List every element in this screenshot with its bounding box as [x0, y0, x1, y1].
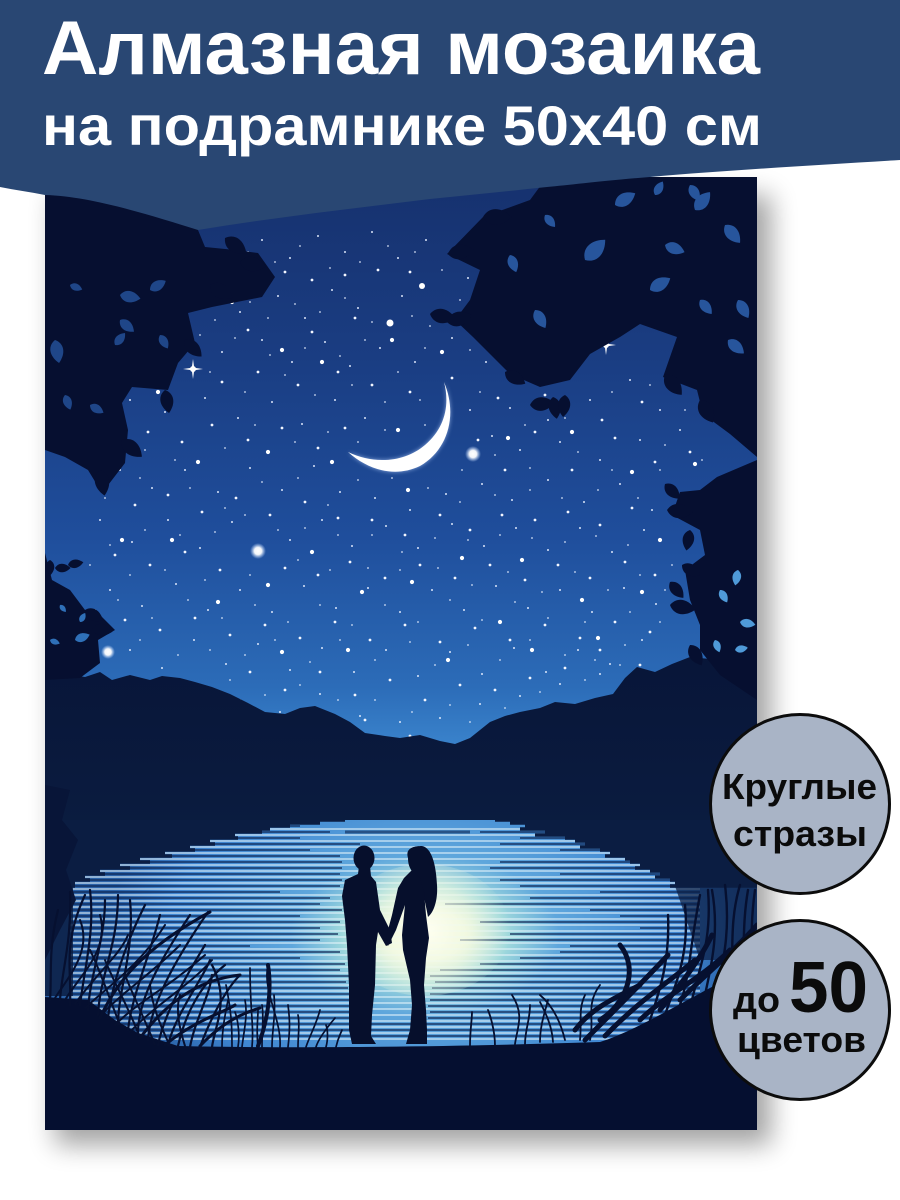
- leaf highlights right side: [712, 569, 756, 654]
- dark streaked lake edge: [45, 820, 757, 886]
- badge: up to 50 colours: цветов: [737, 1019, 866, 1060]
- badge: up to 50 colours: [710, 920, 890, 1100]
- stars: [90, 232, 714, 736]
- dark shrub at left edge: [45, 820, 78, 960]
- tree: lower left: [45, 553, 115, 680]
- foreground shore: [45, 986, 757, 1130]
- lake: [45, 815, 757, 1055]
- header banner: [0, 0, 900, 230]
- dark ripple lines: [70, 826, 700, 1036]
- dark right and left margins of lake: [675, 886, 757, 960]
- badge: round rhinestones: Круглые: [722, 766, 877, 807]
- tree: upper right: [429, 177, 757, 457]
- moonlight glow: [373, 864, 506, 996]
- light ripple lines: [70, 829, 700, 1039]
- lake water: [45, 815, 757, 1055]
- tree: right side: [661, 460, 757, 700]
- badge: round rhinestones: [710, 714, 890, 894]
- bright sparkle stars: [101, 283, 616, 659]
- grass left: [50, 890, 342, 1047]
- leaf gaps lower left: [50, 604, 90, 645]
- leaf highlights upper left: [49, 277, 172, 417]
- crescent moon: [348, 382, 450, 472]
- night sky: [45, 177, 757, 777]
- badge: up to 50 colours: до: [733, 979, 780, 1020]
- canvas drop shadow: [55, 195, 771, 1145]
- leaf highlights upper right: [505, 179, 753, 358]
- man: [342, 846, 392, 1044]
- couple silhouette: [342, 846, 437, 1044]
- painting: night lake scene: [45, 177, 757, 1130]
- forest on far shore: [45, 657, 757, 820]
- badge: round rhinestones: стразы: [733, 813, 867, 854]
- badge: up to 50 colours: 50: [789, 948, 868, 1028]
- woman: [385, 846, 437, 1044]
- subtitle: на подрамнике 50х40 см: [42, 94, 762, 157]
- title: Алмазная мозаика: [42, 6, 761, 91]
- tree: upper left: [45, 177, 275, 497]
- grass right: [470, 885, 757, 1046]
